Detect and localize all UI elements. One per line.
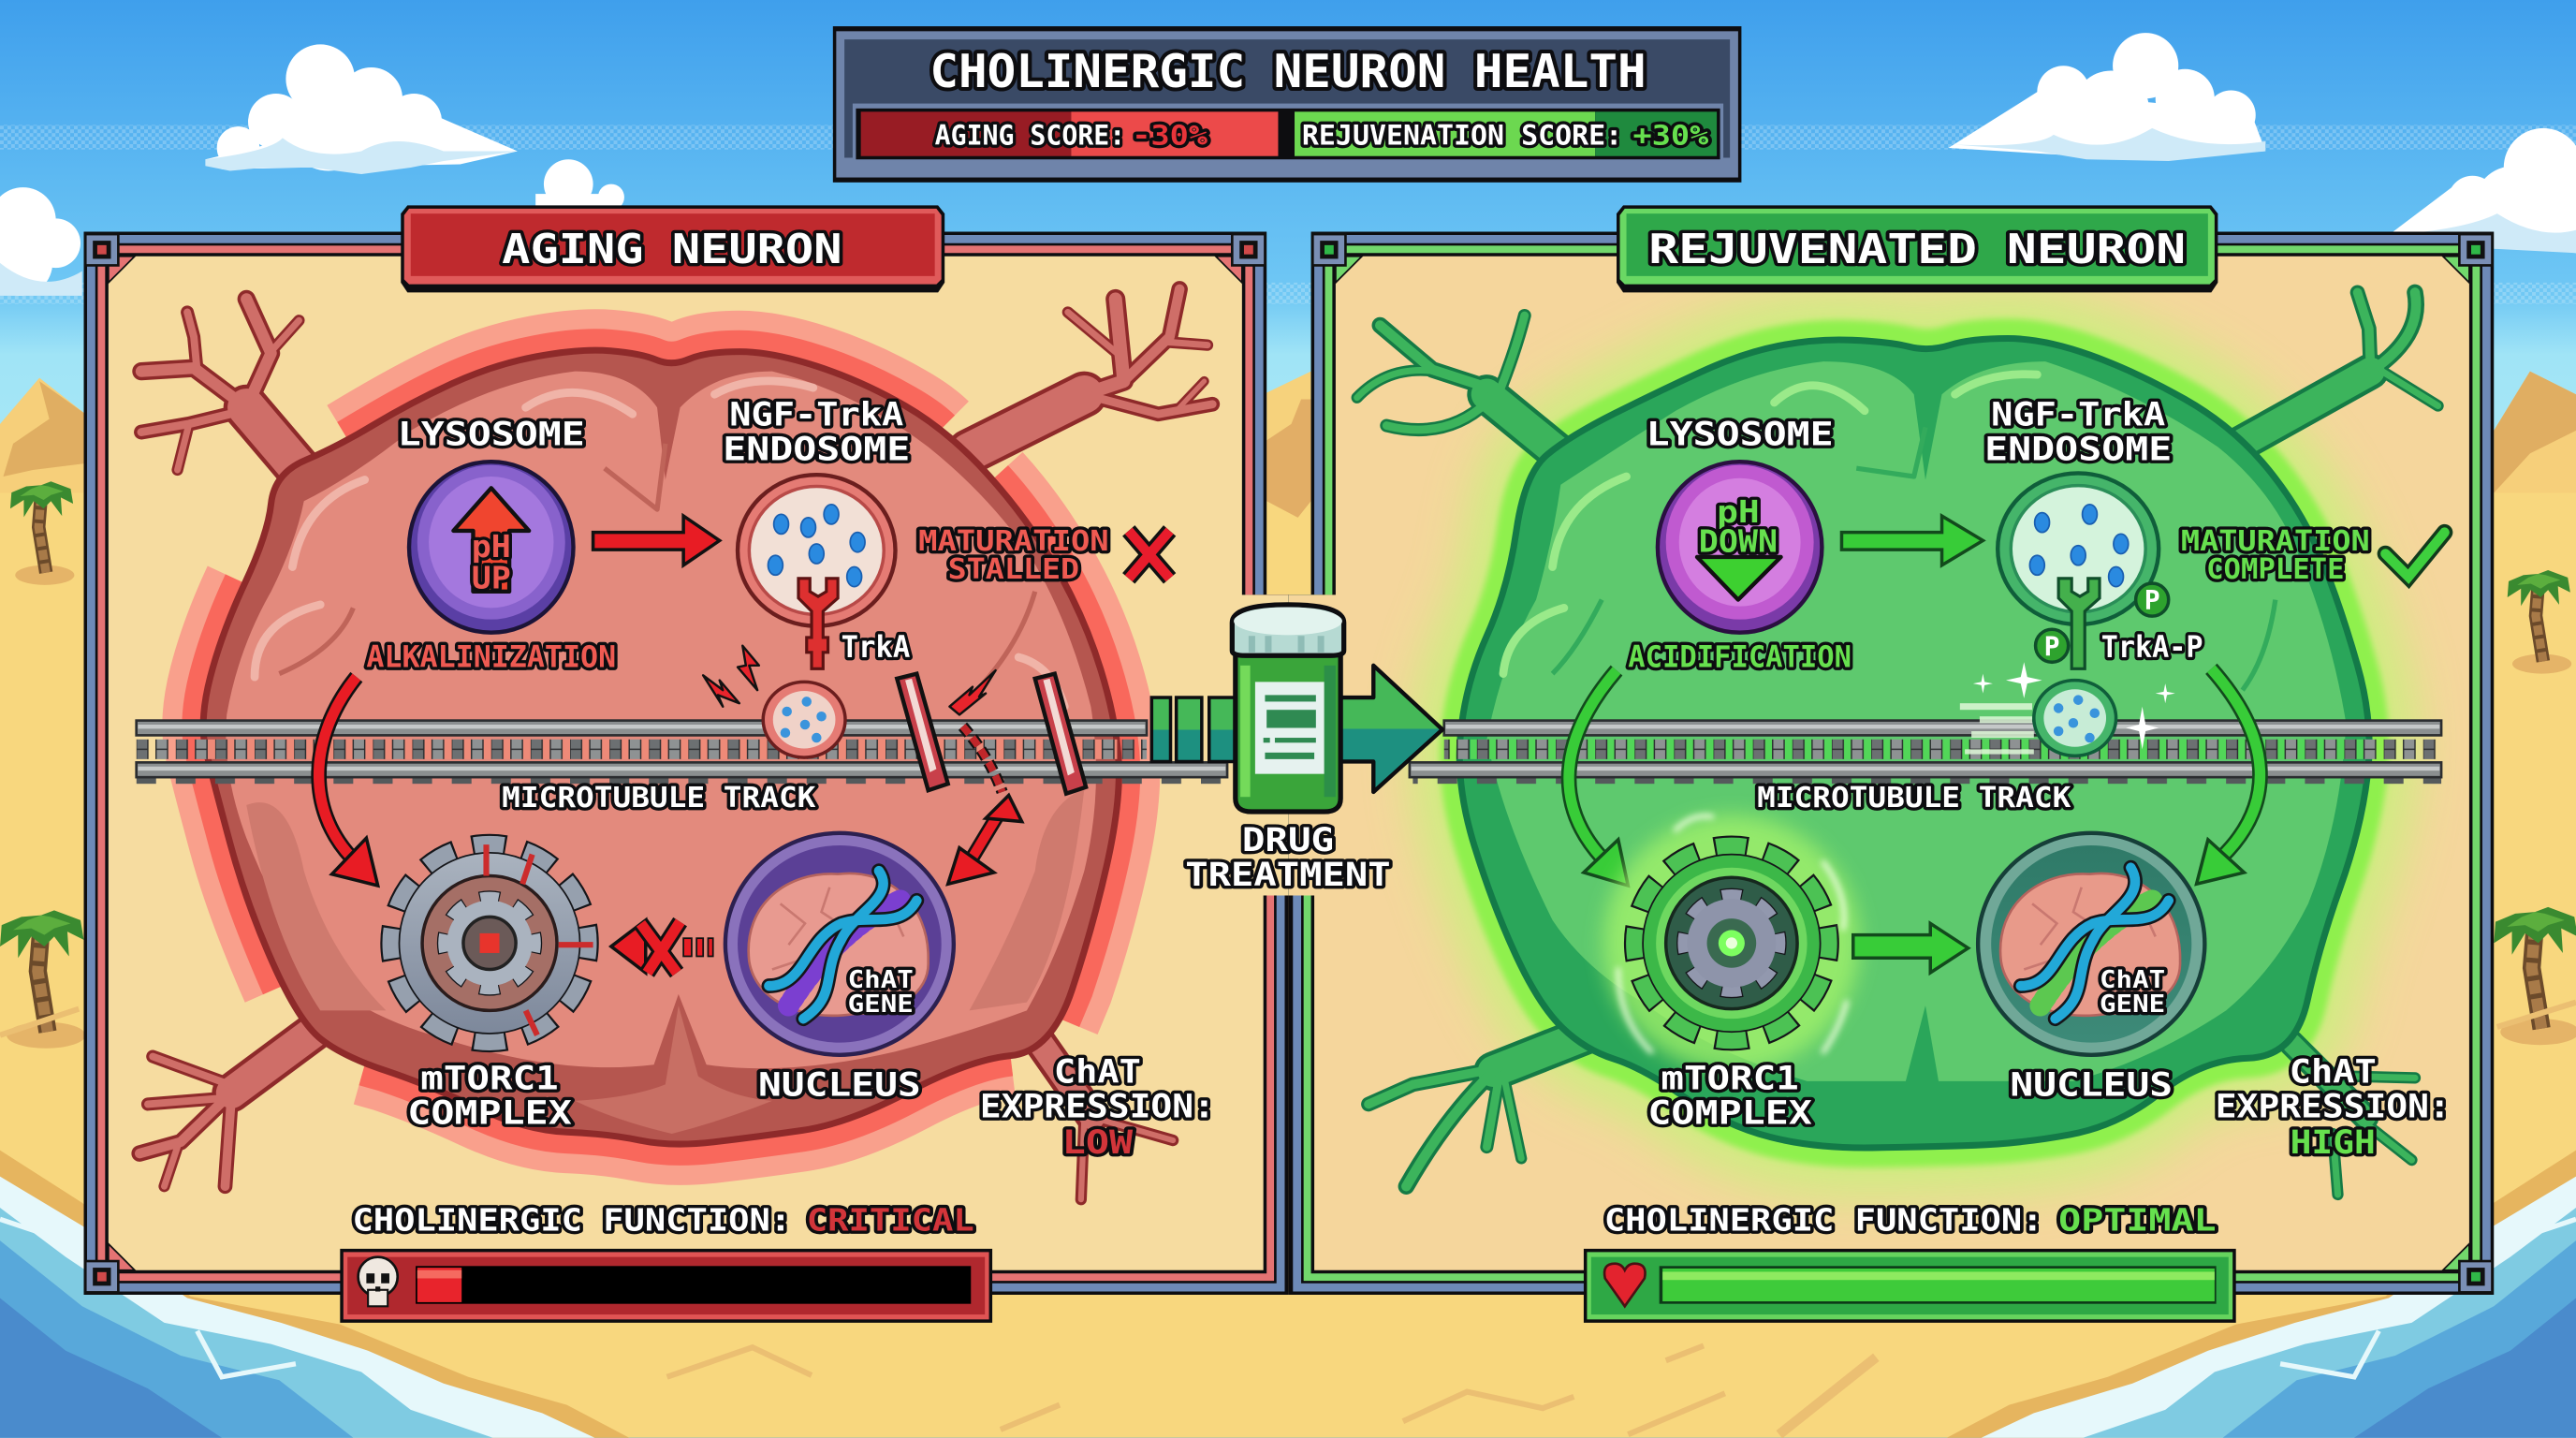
label: maturation complete: MATURATION [2181,525,2370,558]
icon: heart [1604,1264,1646,1306]
health bar: critical [340,1249,992,1323]
arrow: track to nucleus [2197,668,2260,884]
phosphate badge [2136,583,2169,616]
DNA helix [768,871,916,1019]
header: rejuvenated neuron [1617,205,2217,292]
DNA helix [2021,868,2169,1019]
label: alkalinization: ALKALINIZATION [366,641,616,675]
arrow: lysosome to endosome [1841,516,1983,565]
phosphate badge: P [2044,631,2060,662]
label: maturation stalled: MATURATION [918,525,1109,558]
label: acidification: ACIDIFICATION [1628,641,1852,675]
arrow: lysosome to endosome [593,516,720,565]
score bars [853,104,1723,161]
label: maturation stalled [918,525,1109,586]
dunes [0,372,2576,518]
endosome: aging [738,475,896,626]
header: rejuvenated neuron: REJUVENATED NEURON [1648,226,2186,273]
label: ChAT expression high [2216,1053,2451,1162]
nucleus: rejuvenated: GENE [2100,990,2165,1018]
nucleus: rejuvenated [1978,833,2204,1055]
arrow: track to nucleus, disrupted [948,795,1022,884]
nucleus: aging: GENE [848,990,914,1018]
label: microtubule track: MICROTUBULE TRACK [502,782,815,814]
icons: damage sparks [703,646,996,714]
icon: skull [359,1257,398,1306]
TrkA-P receptor [2036,579,2169,668]
header: aging neuron: AGING NEURON [502,226,842,273]
TrkA receptor: aging [798,579,838,668]
dendrites: aging [139,289,1212,1199]
title panel [833,26,1741,183]
label: ChAT expression high: EXPRESSION: [2216,1087,2451,1125]
label: mTORC1 complex: COMPLEX [407,1093,572,1132]
lysosome: rejuvenated: DOWN [1699,523,1778,560]
palm trees [0,481,2576,1049]
nucleus: aging [725,833,954,1055]
drug treatment: bottle with arrow [1151,605,1442,894]
blocked arrow: nucleus to mTORC1 [611,920,713,973]
label: drug treatment: TREATMENT [1185,856,1391,894]
label: microtubule track: MICROTUBULE TRACK [1757,782,2071,814]
label: ChAT expression high: ChAT [2290,1053,2377,1092]
label: mTORC1 complex [1647,1060,1812,1132]
aging score: -30% [1132,119,1208,151]
heading: endosome [1984,396,2172,468]
lysosome: aging: UP [472,559,511,595]
clouds [0,33,2576,296]
sea, right [1947,1151,2576,1438]
title: CHOLINERGIC NEURON HEALTH [929,44,1647,98]
dendrites: rejuvenated [1357,292,2438,1195]
label: mTORC1 complex [407,1060,572,1132]
sea, left [0,1151,629,1438]
sand ripples [0,1003,2576,1434]
label: cholinergic function optimal: OPTIMAL [2058,1202,2217,1239]
neuron body: aging [139,289,1212,1199]
label: cholinergic function critical [352,1202,974,1239]
brain [749,873,929,1016]
label: ChAT expression low: ChAT [1054,1053,1141,1092]
panel: rejuvenated neuron [1289,205,2494,1323]
label: ChAT expression low: EXPRESSION: [980,1087,1215,1125]
label: ChAT expression low [980,1053,1215,1162]
label: nucleus: NUCLEUS [758,1066,921,1105]
endosome: rejuvenated [1998,473,2159,624]
label: ChAT expression low: LOW [1062,1123,1134,1162]
label: drug treatment: DRUG [1242,821,1334,859]
label: TrkA-P: TrkA-P [2101,631,2203,665]
icon: red X [1129,531,1170,579]
gear: mTORC1 aging [391,844,593,1042]
phosphate badge: P [2144,585,2160,616]
neuron body: rejuvenated [1357,292,2438,1195]
heading: endosome: ENDOSOME [723,430,910,468]
lysosome: rejuvenated: pH [1717,493,1760,530]
phosphate badge [2036,629,2069,662]
health bar: optimal [1584,1249,2236,1323]
lysosome: aging [409,462,574,633]
sand [0,468,2576,1438]
speed lines and sparkles [1960,662,2175,755]
label: cholinergic function optimal: CHOLINERGIC FUNCTION: [1604,1202,2042,1239]
aging score: AGING SCORE: [935,119,1125,151]
heading: lysosome: LYSOSOME [1647,416,1834,454]
rejuvenation score: REJUVENATION SCORE: [1302,119,1622,151]
label: maturation complete: COMPLETE [2206,553,2345,586]
lysosome: rejuvenated [1658,462,1822,633]
heading: endosome: NGF-TrkA [729,396,903,434]
nucleus: rejuvenated: ChAT [2100,965,2165,993]
microtubule track: aging [137,721,1227,784]
label: drug treatment [1185,821,1391,894]
label: cholinergic function optimal [1604,1202,2217,1239]
nucleus: aging: ChAT [848,965,914,993]
label: maturation stalled: STALLED [948,553,1079,586]
barriers on track [897,674,1086,794]
brain [2000,873,2180,1016]
heading: endosome: NGF-TrkA [1991,396,2165,434]
icon: check mark [2385,533,2445,577]
label: maturation complete [2181,525,2370,586]
heading: endosome [723,396,910,468]
transport vesicle: moving [2034,681,2116,756]
label: nucleus: NUCLEUS [2010,1066,2173,1105]
rejuvenation score: +30% [1633,119,1709,151]
label: ChAT expression high: HIGH [2291,1123,2376,1162]
header: aging neuron [401,205,944,292]
gear: mTORC1 active [1603,815,1860,1071]
panel: aging neuron [84,205,1289,1323]
broken transport chain [962,726,1003,792]
panel frame: aging [84,231,1289,1295]
label: cholinergic function critical: CHOLINERGIC FUNCTION: [352,1202,791,1239]
microtubule track: rejuvenated [1410,721,2441,784]
arrow: treatment direction [1151,666,1442,792]
panel frame: rejuvenated [1289,231,2494,1295]
transport vesicle: stalled [763,682,845,757]
arrow: lysosome to mTORC1 [1569,670,1628,886]
label: mTORC1 complex: mTORC1 [420,1060,559,1098]
label: mTORC1 complex: mTORC1 [1661,1060,1799,1098]
arrow: mTORC1 to nucleus [1853,923,1969,973]
label: TrkA: TrkA [842,631,910,665]
label: mTORC1 complex: COMPLEX [1647,1093,1812,1132]
lysosome: aging: pH [472,528,511,565]
label: cholinergic function critical: CRITICAL [807,1202,974,1239]
icon: pill bottle [1232,605,1344,812]
arrow: lysosome to mTORC1 [319,677,378,886]
heading: lysosome: LYSOSOME [398,416,585,454]
heading: endosome: ENDOSOME [1984,430,2172,468]
